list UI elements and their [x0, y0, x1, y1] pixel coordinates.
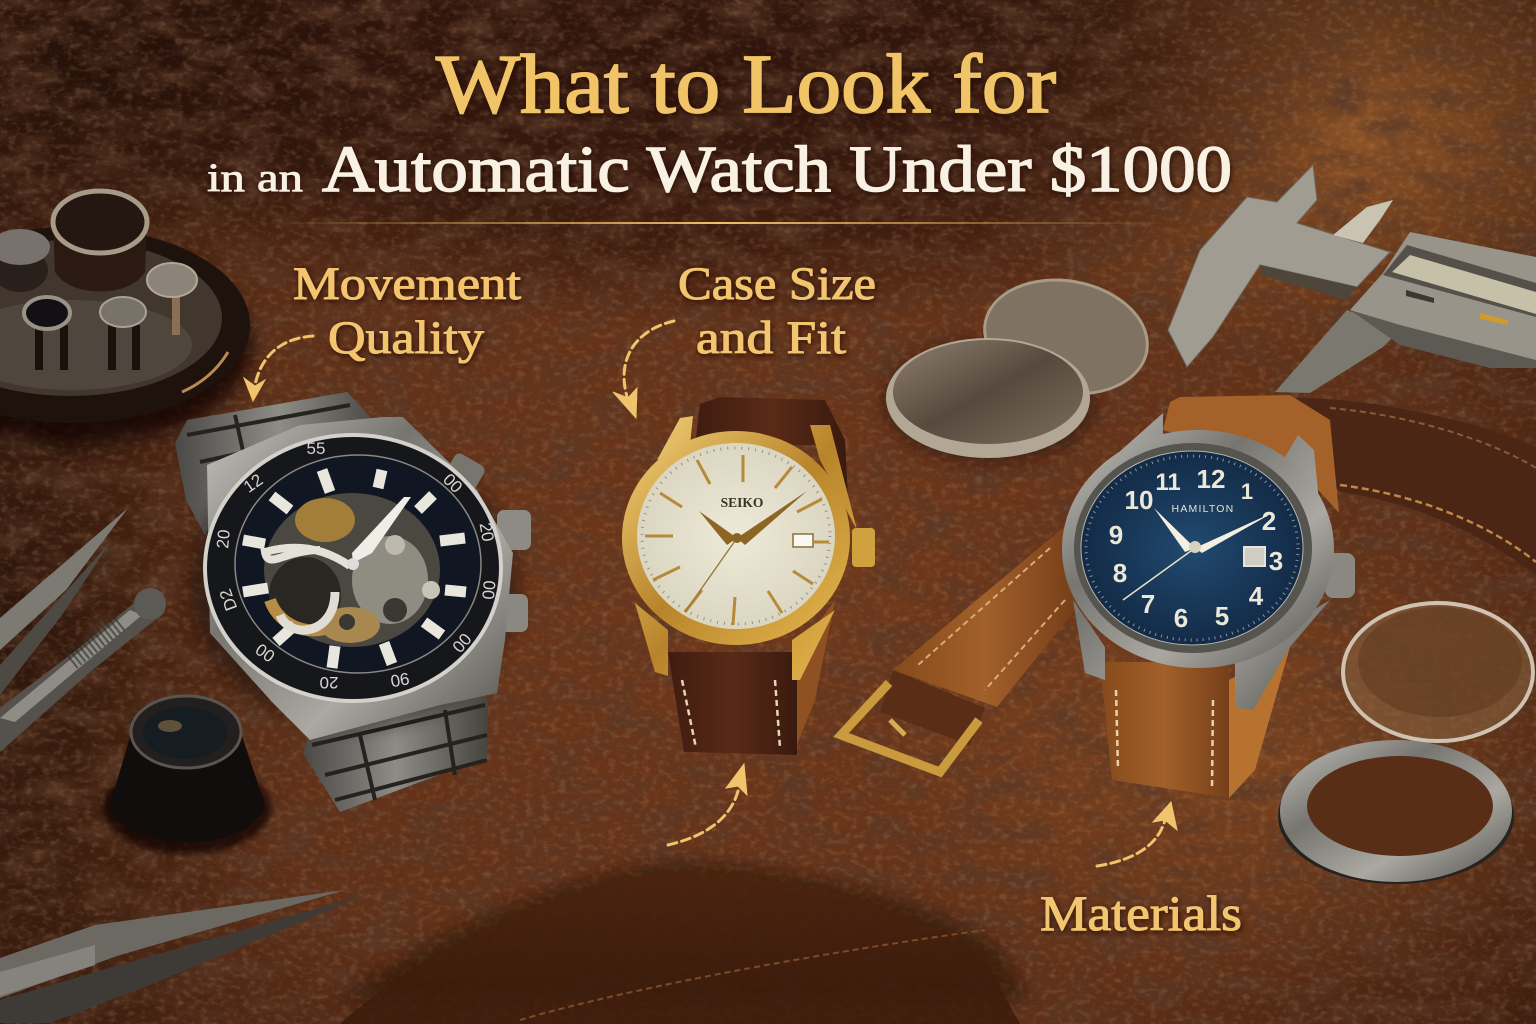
stud middle	[108, 325, 140, 370]
numerals: 6	[1174, 603, 1188, 633]
arrow: Case Size	[613, 321, 674, 418]
markers	[645, 455, 829, 625]
label: Movement Quality: Quality	[328, 312, 485, 364]
watch: skeleton chronograph (Movement Quality): D2	[216, 586, 241, 613]
upper slider jaw	[1333, 200, 1393, 243]
button	[1480, 313, 1508, 325]
tool: parts tray	[0, 191, 252, 445]
label: Case Size and Fit: Case Size	[678, 258, 876, 310]
label: Case Size and Fit: and Fit	[696, 312, 846, 364]
markers	[243, 470, 466, 668]
watch: skeleton chronograph (Movement Quality): 20	[213, 529, 234, 549]
hands	[265, 497, 411, 630]
big cup	[53, 222, 147, 292]
watch: skeleton chronograph (Movement Quality): 00	[478, 580, 499, 600]
case	[207, 417, 513, 740]
crystals: watch glass discs	[884, 268, 1156, 464]
numerals: 5	[1215, 601, 1229, 631]
crystal ring: clear dome	[1343, 603, 1533, 741]
brand: SEIKO	[721, 495, 763, 510]
numerals: 11	[1155, 469, 1181, 496]
watch: skeleton chronograph (Movement Quality): 12	[240, 470, 266, 497]
buckle	[841, 683, 979, 772]
date window	[793, 534, 813, 547]
numerals: 8	[1113, 558, 1127, 588]
dial	[637, 443, 835, 629]
watch: skeleton chronograph (Movement Quality): 00	[439, 470, 466, 497]
left stud	[0, 248, 48, 292]
numerals: 2	[1262, 506, 1276, 536]
title line 2: Automatic Watch Under $1000	[322, 133, 1232, 206]
numerals: 3	[1269, 546, 1283, 576]
arrow: Materials	[1097, 802, 1177, 866]
watch: skeleton chronograph (Movement Quality)	[175, 392, 531, 812]
hands	[699, 511, 737, 545]
tool: screwdriver	[0, 588, 166, 752]
upper strap	[1163, 395, 1339, 513]
numerals	[1109, 464, 1283, 633]
watch: blue field (Hamilton)	[1062, 395, 1355, 798]
numerals: 9	[1109, 520, 1123, 550]
tool: loupe	[103, 696, 271, 854]
label: Movement Quality	[293, 258, 521, 364]
numerals: 10	[1125, 485, 1153, 515]
arrow: gold watch lower	[668, 764, 747, 845]
lower jaw	[1275, 310, 1400, 393]
lugs	[1073, 413, 1330, 710]
stud dark	[35, 325, 68, 370]
numerals: 12	[1197, 464, 1225, 494]
dial	[235, 455, 481, 673]
lugs	[635, 416, 857, 680]
case	[622, 431, 850, 645]
display	[1383, 245, 1536, 317]
fixed jaw and beam	[1168, 165, 1390, 367]
watch: skeleton chronograph (Movement Quality): 20	[320, 673, 338, 692]
lower strap	[668, 652, 797, 755]
crown	[1325, 553, 1355, 598]
watch: skeleton chronograph (Movement Quality): 00	[252, 639, 278, 666]
title line 1: What to Look for	[436, 38, 1056, 131]
upper strap	[695, 397, 848, 500]
arrow: Movement Quality	[244, 336, 313, 401]
watch: skeleton chronograph (Movement Quality): 55	[307, 439, 325, 458]
watch: skeleton chronograph (Movement Quality): 00	[448, 629, 475, 656]
case	[1062, 430, 1334, 668]
numerals: 7	[1141, 589, 1155, 619]
stud right	[172, 295, 180, 335]
steel bezel ring	[1278, 740, 1514, 884]
lower strap	[1100, 662, 1229, 798]
strap accessory right	[1280, 398, 1536, 575]
tool: caliper	[1168, 165, 1536, 393]
brand: HAMILTON	[1172, 503, 1234, 515]
numerals: 4	[1249, 581, 1264, 611]
tool: tweezers left	[0, 508, 128, 695]
watch: gold dress (Case Size and Fit)	[622, 397, 875, 755]
title line 2: in an	[207, 155, 303, 200]
title	[207, 38, 1232, 206]
crown and pushers	[443, 451, 487, 493]
numerals: 1	[1241, 479, 1253, 504]
label: Case Size and Fit	[678, 258, 876, 364]
skeleton movement	[264, 493, 440, 647]
watch: skeleton chronograph (Movement Quality): 90	[389, 669, 411, 691]
tool: tweezers bottom	[0, 890, 365, 1023]
bracelet	[175, 392, 488, 812]
slider body	[1350, 232, 1536, 367]
watch: skeleton chronograph (Movement Quality): 20	[476, 521, 498, 543]
bezel	[203, 433, 503, 703]
date window	[1244, 547, 1265, 566]
hands	[1154, 508, 1195, 552]
spare brown strap with gold buckle	[841, 527, 1075, 772]
crown	[852, 528, 875, 567]
label: Movement Quality: Movement	[293, 258, 521, 310]
label: Materials: Materials	[1040, 885, 1242, 941]
dial	[1081, 451, 1303, 645]
